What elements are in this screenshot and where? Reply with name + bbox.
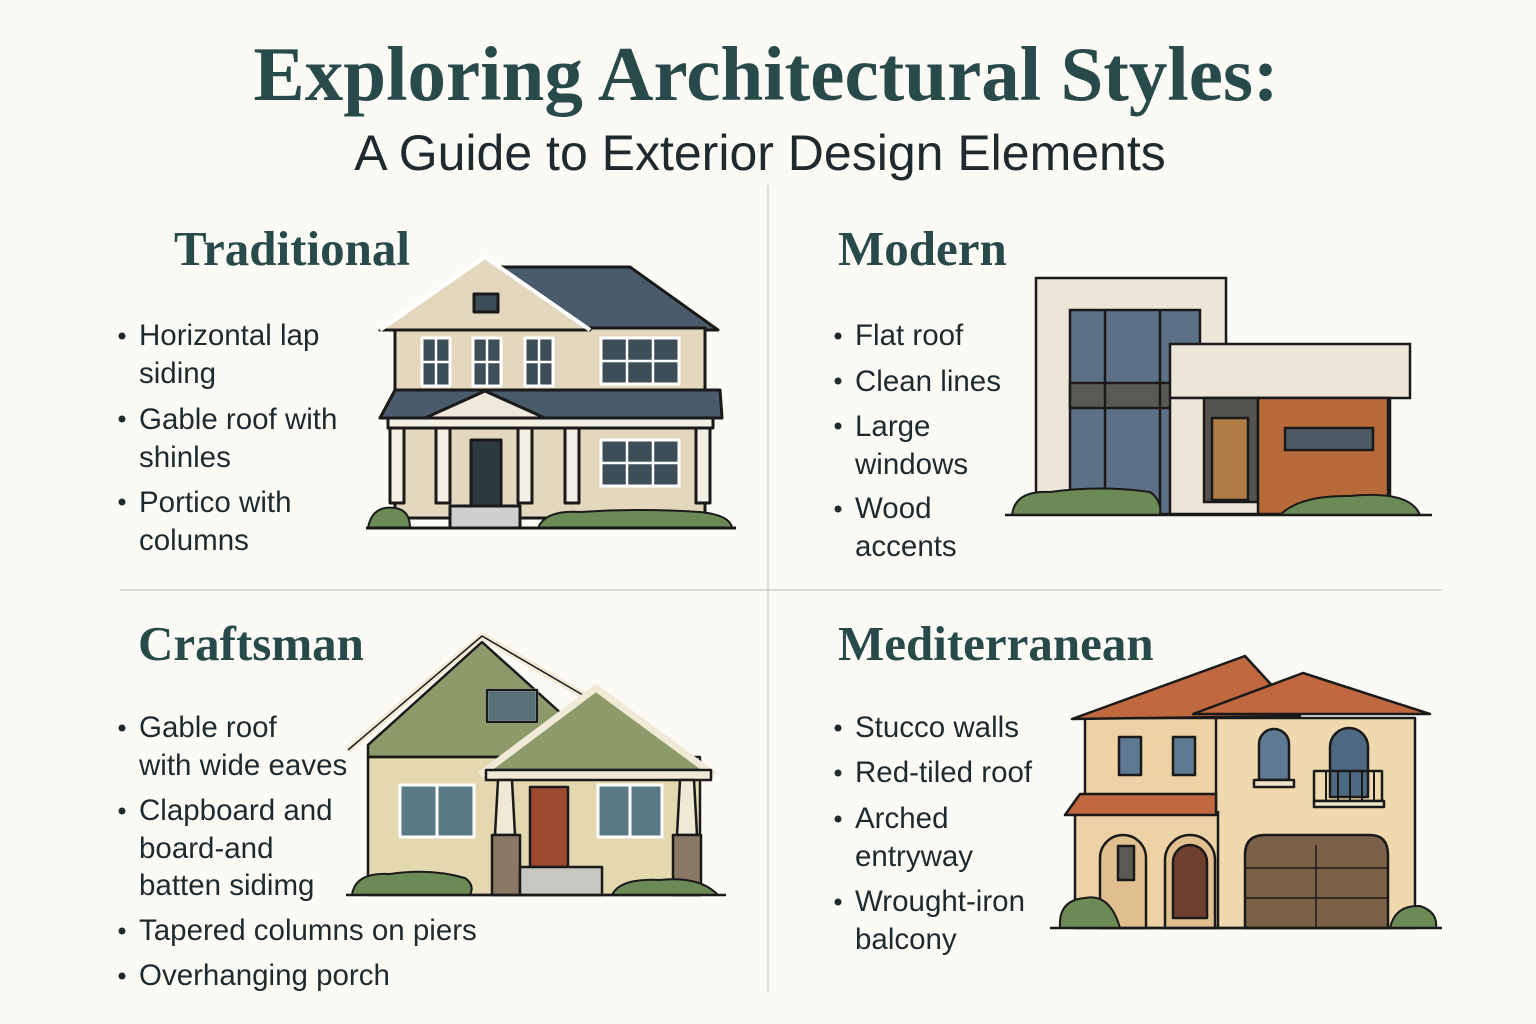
bullet list: traditional: Gable roof with — [139, 403, 337, 436]
bullet list: modern — [834, 319, 1001, 563]
bullet list: modern: accents — [855, 530, 957, 563]
bullet list: mediterranean: balcony — [855, 923, 957, 956]
bullet list: traditional: columns — [139, 524, 249, 557]
illustration: mediterranean house — [1050, 656, 1442, 928]
bullet list: craftsman: Tapered columns on piers — [139, 914, 477, 947]
bullet list: traditional: shinles — [139, 441, 231, 474]
bullet list: traditional: Horizontal lap — [139, 319, 319, 352]
bullet list: mediterranean — [834, 711, 1033, 956]
panel: mediterranean — [834, 616, 1442, 956]
panel: modern — [834, 221, 1432, 563]
bullet list: craftsman: Clapboard and — [139, 794, 333, 827]
title: Exploring Architectural Styles: — [253, 31, 1279, 117]
panel: traditional — [118, 221, 736, 557]
bullet list: craftsman: Overhanging porch — [139, 959, 390, 992]
subtitle: A Guide to Exterior Design Elements — [354, 125, 1166, 181]
bullet list: craftsman: batten sidimg — [139, 869, 314, 902]
bullet list: mediterranean: Arched — [855, 802, 948, 835]
bullet list: mediterranean: Stucco walls — [855, 711, 1019, 744]
heading: Craftsman: Craftsman — [138, 616, 364, 671]
bullet list: modern: Wood — [855, 492, 932, 525]
bullet list: modern: Flat roof — [855, 319, 964, 352]
bullet list: modern: Clean lines — [855, 365, 1001, 398]
heading: Modern: Modern — [838, 221, 1007, 276]
bullet list: mediterranean: entryway — [855, 840, 973, 873]
panel: craftsman — [118, 616, 726, 992]
bullet list: traditional: Portico with — [139, 486, 291, 519]
heading: Mediterranean: Mediterranean — [838, 616, 1154, 671]
illustration: modern house — [1005, 278, 1432, 515]
bullet list: craftsman — [118, 711, 477, 992]
illustration: craftsman house — [346, 636, 726, 895]
illustration: traditional house — [366, 257, 736, 528]
bullet list: craftsman: board-and — [139, 832, 274, 865]
bullet list: modern: windows — [854, 448, 968, 481]
bullet list: craftsman: Gable roof — [139, 711, 278, 744]
bullet list: traditional — [118, 319, 337, 557]
bullet list: mediterranean: Red-tiled roof — [855, 756, 1033, 789]
heading: Traditional: Traditional — [174, 221, 410, 276]
bullet list: traditional: siding — [139, 357, 216, 390]
bullet list: craftsman: with wide eaves — [138, 749, 347, 782]
bullet list: modern: Large — [855, 410, 930, 443]
bullet list: mediterranean: Wrought-iron — [855, 885, 1025, 918]
